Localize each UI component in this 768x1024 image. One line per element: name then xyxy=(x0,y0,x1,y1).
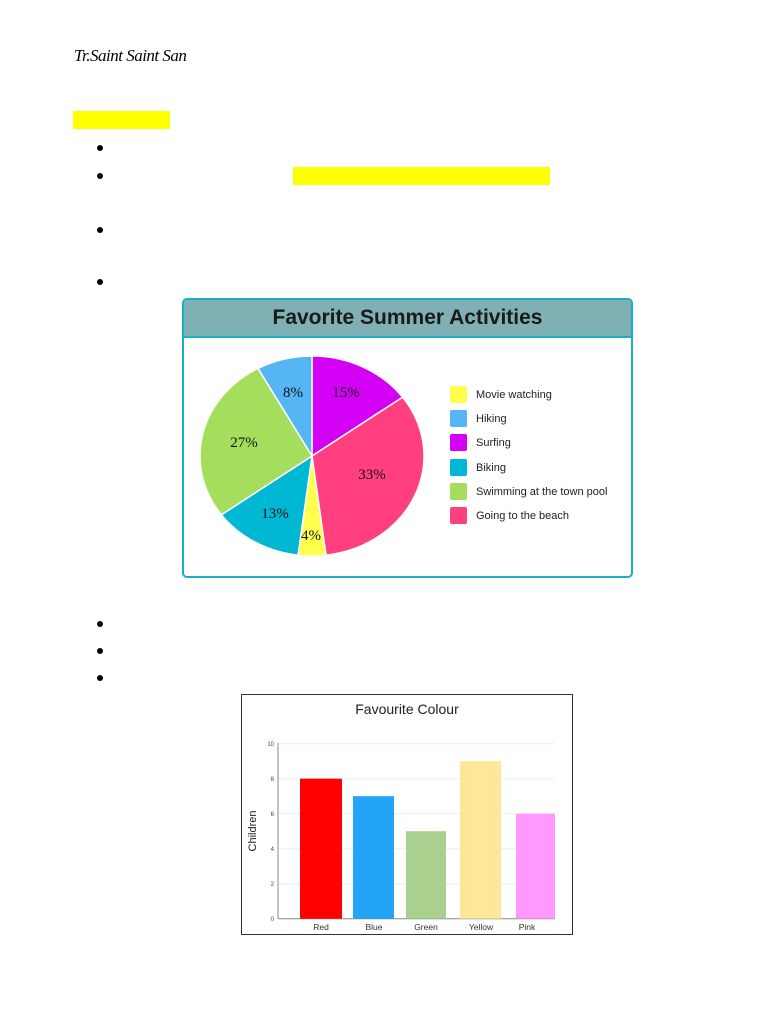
panel: bar chart favourite colour: Green xyxy=(414,922,438,932)
pie chart: 13% xyxy=(261,506,289,522)
pie chart: 33% xyxy=(358,467,386,483)
bars xyxy=(300,761,555,919)
panel: bar chart favourite colour: 6 xyxy=(271,812,275,818)
heading: bar chart title: Favourite Colour xyxy=(355,701,459,717)
panel: bar chart favourite colour: Blue xyxy=(365,922,383,932)
panel: bar chart favourite colour: 8 xyxy=(271,777,275,783)
legend xyxy=(450,386,607,524)
panel: bar chart favourite colour xyxy=(241,694,573,935)
highlight bar 2 xyxy=(293,167,550,185)
pie chart: 4% xyxy=(301,528,321,544)
pie chart: 15% xyxy=(332,385,360,401)
title: teacher name: Tr.Saint Saint San xyxy=(74,46,186,65)
panel: bar chart favourite colour: Red xyxy=(313,922,329,932)
panel: bar chart favourite colour: 2 xyxy=(271,882,275,888)
legend: Biking xyxy=(476,462,506,474)
panel: bar chart favourite colour: Children xyxy=(247,811,259,851)
pie chart: 27% xyxy=(230,435,258,451)
panel: bar chart favourite colour: Pink xyxy=(519,922,536,932)
panel: bar chart favourite colour: 10 xyxy=(267,742,275,748)
bullets xyxy=(97,145,103,681)
heading: pie chart title: Favorite Summer Activities xyxy=(272,306,542,329)
legend: Hiking xyxy=(476,413,507,425)
legend: Going to the beach xyxy=(476,510,569,522)
pie chart: 8% xyxy=(283,385,303,401)
legend: Swimming at the town pool xyxy=(476,486,607,498)
panel: pie chart favorite summer activities xyxy=(182,298,633,578)
heading: pie chart title xyxy=(184,300,631,338)
highlight bar 1 xyxy=(73,111,170,129)
legend: Movie watching xyxy=(476,389,552,401)
panel: bar chart favourite colour: 4 xyxy=(271,847,275,853)
legend: Surfing xyxy=(476,437,511,449)
panel: bar chart favourite colour: Yellow xyxy=(469,922,494,932)
panel: bar chart favourite colour: 0 xyxy=(271,917,275,923)
